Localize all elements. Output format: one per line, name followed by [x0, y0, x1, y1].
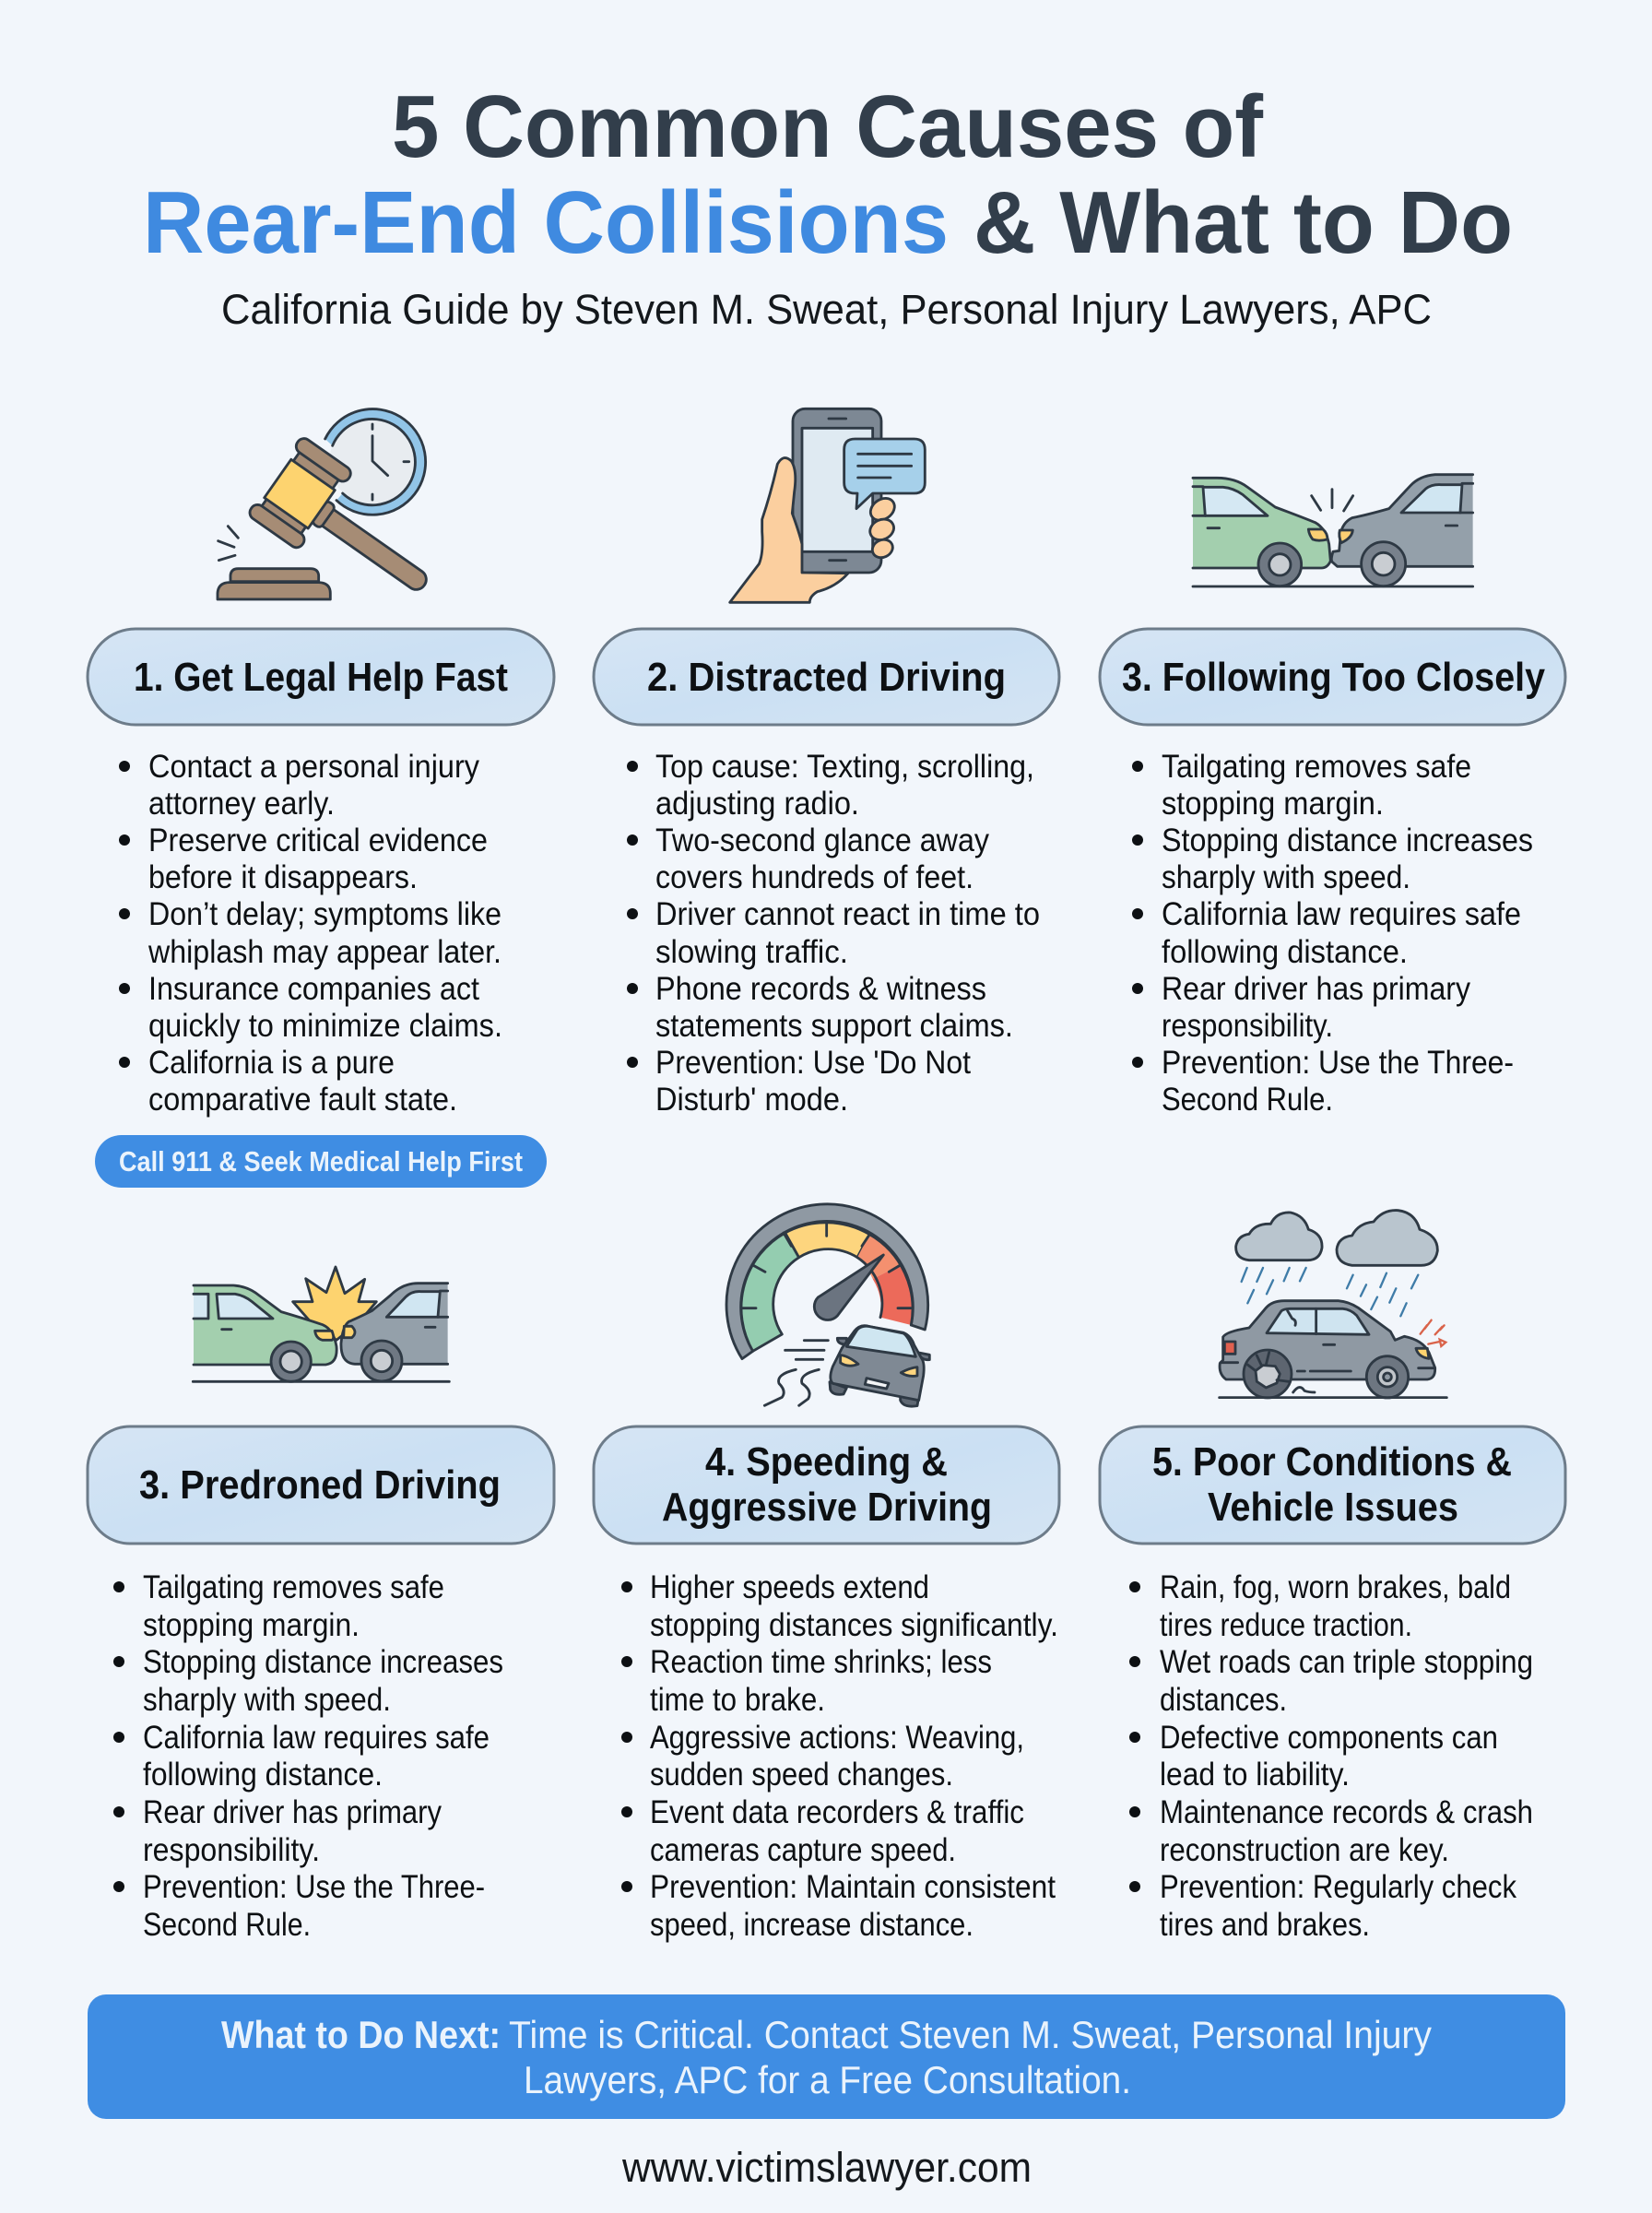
website url: www.victimslawyer.com — [621, 2144, 1032, 2191]
bullet list: covers hundreds of feet. — [655, 859, 974, 895]
bullet list: before it disappears. — [148, 859, 418, 895]
bullet list: Aggressive actions: Weaving, — [650, 1720, 1024, 1756]
heading pill: 1. Get Legal Help Fast — [134, 655, 508, 700]
bullet list: following distance. — [143, 1757, 383, 1793]
bullet list: Prevention: Regularly check — [1160, 1869, 1516, 1905]
heading pill — [594, 629, 1059, 725]
icon: two cars nose to nose — [1193, 475, 1473, 586]
bullet list: Prevention: Use 'Do Not — [655, 1045, 971, 1081]
bullet list: sharply with speed. — [143, 1682, 391, 1718]
heading pill: Vehicle Issues — [1208, 1485, 1458, 1530]
call to action banner: Time is Critical. Contact Steven M. Sweat, Personal Injury — [509, 2013, 1432, 2056]
title: & What to Do — [974, 173, 1513, 272]
heading pill — [88, 629, 554, 725]
bullet list: Wet roads can triple stopping — [1160, 1644, 1533, 1680]
bullet list: reconstruction are key. — [1160, 1832, 1449, 1868]
bullet list: California is a pure — [148, 1045, 395, 1081]
panel: predroned driving — [88, 1267, 554, 1943]
bullet list: Higher speeds extend — [650, 1569, 929, 1605]
bullet list: sharply with speed. — [1162, 859, 1410, 895]
bullet list: Defective components can — [1160, 1720, 1498, 1756]
bullet list: attorney early. — [148, 786, 335, 822]
heading pill: 3. Following Too Closely — [1122, 655, 1545, 700]
title: 5 Common Causes of — [392, 77, 1264, 176]
bullet list: Rear driver has primary — [143, 1794, 442, 1830]
bullet list: slowing traffic. — [655, 934, 848, 970]
heading pill: 5. Poor Conditions & — [1152, 1439, 1512, 1485]
panel: distracted driving — [594, 408, 1059, 1118]
heading pill — [594, 1426, 1059, 1544]
bullet list: Prevention: Use the Three- — [1162, 1045, 1514, 1081]
bullet list: Driver cannot react in time to — [655, 896, 1040, 932]
title: Rear-End Collisions — [143, 173, 949, 272]
heading pill: Aggressive Driving — [662, 1485, 992, 1530]
panel: speeding and aggressive driving — [594, 1204, 1059, 1943]
bullet list: Stopping distance increases — [143, 1644, 503, 1680]
heading pill — [1100, 1426, 1565, 1544]
icon: damaged car in rain — [1220, 1211, 1446, 1398]
bullet list: responsibility. — [143, 1832, 320, 1868]
icon: speedometer with car — [726, 1204, 929, 1406]
bullet list: Rear driver has primary — [1162, 971, 1470, 1007]
bullet list — [113, 1569, 503, 1943]
call to action banner: Lawyers, APC for a Free Consultation. — [524, 2058, 1131, 2101]
bullet list: sudden speed changes. — [650, 1757, 953, 1793]
panel: get legal help fast — [88, 409, 554, 1188]
icon: cars colliding with burst — [193, 1267, 449, 1381]
bullet list: Phone records & witness — [655, 971, 986, 1007]
bullet list: Second Rule. — [1162, 1082, 1333, 1118]
bullet list: Contact a personal injury — [148, 749, 479, 785]
bullet list: stopping margin. — [143, 1607, 360, 1643]
bullet list: California law requires safe — [143, 1720, 490, 1756]
bullet list — [627, 749, 1040, 1118]
bullet list: Maintenance records & crash — [1160, 1794, 1533, 1830]
bullet list: Reaction time shrinks; less — [650, 1644, 992, 1680]
bullet list: Tailgating removes safe — [143, 1569, 444, 1605]
bullet list: Top cause: Texting, scrolling, — [655, 749, 1034, 785]
call to action banner — [88, 1994, 1565, 2119]
panel: poor conditions and vehicle issues — [1100, 1211, 1565, 1943]
bullet list: Prevention: Maintain consistent — [650, 1869, 1056, 1905]
icon: gavel and clock — [218, 409, 454, 621]
bullet list: Disturb' mode. — [655, 1082, 848, 1118]
bullet list: Rain, fog, worn brakes, bald — [1160, 1569, 1511, 1605]
bullet list: Don’t delay; symptoms like — [148, 896, 502, 932]
bullet list: tires reduce traction. — [1160, 1607, 1412, 1643]
callout: call 911 — [95, 1135, 547, 1188]
bullet list: stopping distances significantly. — [650, 1607, 1058, 1643]
bullet list: Second Rule. — [143, 1907, 311, 1943]
panel: following too closely — [1100, 475, 1565, 1118]
icon: hand holding phone — [730, 408, 925, 602]
callout: call 911: Call 911 & Seek Medical Help First — [119, 1145, 523, 1178]
bullet list: Prevention: Use the Three- — [143, 1869, 485, 1905]
bullet list — [1129, 1569, 1533, 1943]
heading pill — [1100, 629, 1565, 725]
bullet list — [621, 1569, 1058, 1943]
bullet list: statements support claims. — [655, 1008, 1013, 1044]
bullet list: distances. — [1160, 1682, 1287, 1718]
bullet list: cameras capture speed. — [650, 1832, 956, 1868]
heading pill: 2. Distracted Driving — [647, 655, 1006, 700]
bullet list: tires and brakes. — [1160, 1907, 1370, 1943]
title — [143, 77, 1513, 272]
bullet list: lead to liability. — [1160, 1757, 1350, 1793]
subtitle: California Guide by Steven M. Sweat, Personal Injury Lawyers, APC — [221, 286, 1432, 333]
bullet list: time to brake. — [650, 1682, 825, 1718]
bullet list: adjusting radio. — [655, 786, 859, 822]
heading pill: 3. Predroned Driving — [139, 1462, 501, 1508]
bullet list — [1132, 749, 1533, 1118]
bullet list: Tailgating removes safe — [1162, 749, 1471, 785]
bullet list: stopping margin. — [1162, 786, 1384, 822]
bullet list: responsibility. — [1162, 1008, 1333, 1044]
bullet list: Event data recorders & traffic — [650, 1794, 1024, 1830]
bullet list: whiplash may appear later. — [148, 934, 502, 970]
bullet list: Preserve critical evidence — [148, 822, 488, 858]
heading pill — [88, 1426, 554, 1544]
bullet list: Insurance companies act — [148, 971, 479, 1007]
bullet list: quickly to minimize claims. — [148, 1008, 502, 1044]
bullet list: Stopping distance increases — [1162, 822, 1533, 858]
bullet list — [119, 749, 502, 1118]
bullet list: Two-second glance away — [655, 822, 989, 858]
heading pill: 4. Speeding & — [705, 1439, 948, 1485]
bullet list: California law requires safe — [1162, 896, 1521, 932]
bullet list: speed, increase distance. — [650, 1907, 974, 1943]
bullet list: comparative fault state. — [148, 1082, 457, 1118]
call to action banner: What to Do Next: — [221, 2013, 501, 2056]
bullet list: following distance. — [1162, 934, 1408, 970]
